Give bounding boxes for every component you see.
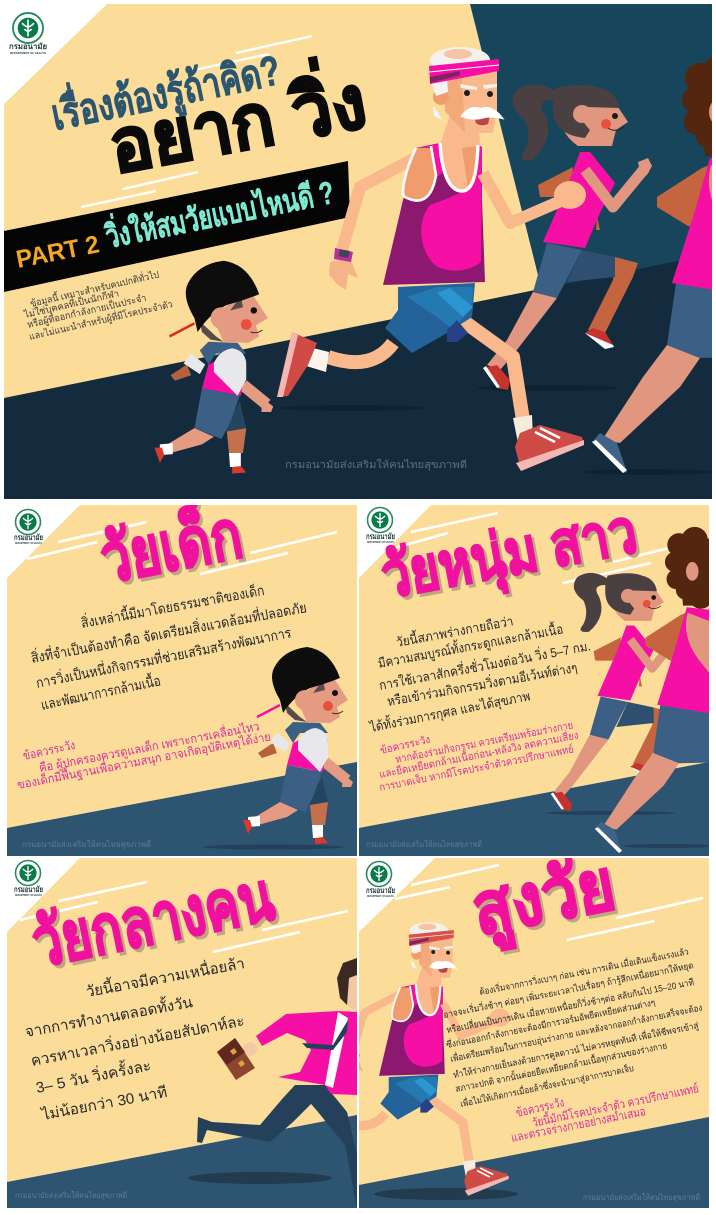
heading: young adults: วัยหนุ่ม สาว [379,500,646,618]
logo: กรมอนามัย [366,532,395,541]
heading: middle age [32,880,280,968]
callout: seniors caution [509,1079,700,1145]
illustration: child runner [154,261,273,474]
text block: children advice: สิ่งเหล่านี้มีมาโดยธรรมชาติของเด็ก [79,580,266,631]
panel: main cover [4,4,716,499]
text block: children advice: การวิ่งเป็นหนึ่งกิจกรรมที่ช่วยเสริมสร้างพัฒนาการ [34,623,293,691]
heading: seniors: สูงวัย [466,845,622,956]
text block: young adults advice: ได้ทั้งร่วมการกุศล และได้สุขภาพ [367,686,532,736]
text block: middle age advice: จากการทำงานตลอดทั้งวัน [23,991,194,1041]
text block: seniors advice: ต้องเริ่มจากการวิ่งเบาๆ ก่อน เช่น การเดิน เมื่อเดินแข็งแรงแล้ว [478,945,689,997]
logo [14,510,43,545]
text block: middle age advice [23,952,246,1124]
logo: department of health: กรมอนามัย [9,42,47,51]
text block: middle age advice: 3– 5 วัน วิ่งครั้งละ [34,1054,153,1097]
heading: children [100,505,246,585]
heading: children: วัยเด็ก [94,493,248,598]
callout: young adults caution: หากต้องร่วมกิจกรรม ควรเตรียมพร้อมร่างกาย [394,718,574,766]
text block: disclaimer [22,268,174,343]
callout: young adults caution: การบาดเจ็บ หากมีโรคประจำตัวควรปรึกษาแพทย์ [378,741,575,794]
illustration: adult woman runner [595,527,714,853]
logo [366,862,395,898]
footer credit: กรมอนามัยส่งเสริมให้คนไทยสุขภาพดี [22,840,151,849]
banner: part 2 [4,161,350,292]
text block: children advice [29,580,308,713]
text block: middle age advice: ไม่น้อยกว่า 30 นาที [39,1083,169,1124]
heading: seniors: สูงวัย [469,848,625,959]
heading: cover title: อยาก วิ่ง [101,49,373,189]
heading: middle age: วัยกลางคน [29,861,283,985]
banner: part 2: วิ่งให้สมวัยแบบไหนดี ? [101,169,337,255]
panel: middle age [7,858,357,1208]
text block: seniors advice: สภาวะปกติ จากนั้นค่อยยืดเหยียดกล้ามเนื้อทุกส่วนของร่างกาย [454,1038,668,1095]
illustration: businessman runner [197,958,357,1208]
illustration: child runner [243,647,353,844]
logo: DEPARTMENT OF HEALTH [15,541,42,545]
logo [366,508,395,544]
logo: DEPARTMENT OF HEALTH [367,894,394,898]
callout: children caution: ข้อควรระวัง [22,738,76,763]
text block: young adults advice: วัยนี้สภาพร่างกายถือว่า [394,611,515,650]
logo: DEPARTMENT OF HEALTH [367,540,394,544]
text block: seniors advice: ทำให้ร่างกายเย็นลงด้วยการคูลดาวน์ ไม่ควรหยุดทันที เพื่อให้ชีพจรเข้าสู่ [452,1018,700,1081]
logo: กรมอนามัย [14,885,43,894]
banner: part 2: PART 2 [14,230,102,274]
panel: children [7,493,357,856]
text block: disclaimer: และไม่แนะนำสำหรับผู้ที่มีโรคประจำตัว [28,297,174,343]
callout: seniors caution: และตรวจร่างกายอย่างสม่ำเสมอ [509,1102,647,1145]
logo: กรมอนามัย [14,533,43,542]
illustration: old man runner [277,47,586,471]
logo: department of health [9,13,47,55]
illustration: old man runner [359,922,510,1196]
callout: children caution: ของเด็กมีพื้นฐานเพื่อความสนุก อาจเกิดอุบัติเหตุได้ง่าย [16,727,272,793]
heading: middle age: วัยกลางคน [26,858,280,982]
logo: department of health: DEPARTMENT OF HEALTH [10,51,46,55]
callout: young adults caution: ข้อควรระวัง [379,734,431,757]
text block: young adults advice: มีความสมบูรณ์ทั้งกระดูกและกล้ามเนื้อ [376,619,564,672]
footer credit: กรมอนามัยส่งเสริมให้คนไทยสุขภาพดี [366,840,482,849]
text block: disclaimer: ไม่ใช่บุคคลที่เป็นนักกีฬา [22,286,120,321]
text block: young adults advice: การใช้เวลาสักครึ่งชั่วโมงต่อวัน วิ่ง 5–7 กม. [378,637,592,693]
text block: children advice: และพัฒนาการกล้ามเนื้อ [39,670,162,713]
illustration: adult woman runner [592,55,716,473]
illustration: young woman runner [483,84,652,390]
text block: seniors advice [442,945,703,1110]
illustration: young woman runner [550,572,666,812]
text block: disclaimer: ข้อมูลนี้ เหมาะสำหรับคนปกติทั่วไป [29,268,160,310]
text block: seniors advice: เพื่อไม่ให้เกิดการเมื่อยล้าซึ่งจะนำมาสู่อาการบาดเจ็บ [459,1061,635,1110]
footer credit: กรมอนามัยส่งเสริมให้คนไทยสุขภาพดี [285,459,467,471]
footer credit: กรมอนามัยส่งเสริมให้คนไทยสุขภาพดี [15,1191,127,1200]
heading: young adults [381,517,640,600]
logo: กรมอนามัย [366,886,395,895]
panel: seniors [359,858,709,1208]
callout: young adults caution: และยืดเหยียดกล้ามเนื้อก่อน-หลังวิ่ง ลดความเสี่ยง [378,727,580,781]
callout: seniors caution: ข้อควรระวัง [515,1095,565,1120]
logo: DEPARTMENT OF HEALTH [15,893,42,897]
text block: young adults advice: หรือเข้าร่วมกิจกรรมวิ่งตามอีเว้นท์ต่างๆ [386,659,578,709]
heading: cover subtitle: เรื่องต้องรู้ถ้าคิด? [46,40,285,142]
text block: children advice: สิ่งที่จำเป็นต้องทำคือ จัดเตรียมสิ่งแวดล้อมที่ปลอดภัย [29,598,308,666]
text block: disclaimer: หรือผู้ที่ออกกำลังกายเป็นประจำ [26,291,148,331]
logo [14,860,43,897]
heading: young adults: วัยหนุ่ม สาว [376,497,643,615]
text block: seniors advice: ซึ่งก่อนออกกำลังกายจะต้องมีการวอร์มอัพยืดเหยียดส่วนต่างๆ [445,995,656,1050]
callout: children caution: คือ ผู้ปกครองควรดูแลเด็ก เพราะการเคลื่อนไหว [38,717,261,776]
text block: middle age advice: ควรหาเวลาวิ่งอย่างน้อยสัปดาห์ละ [29,1010,246,1070]
panel: young adults [359,497,714,856]
heading: children: วัยเด็ก [97,496,251,601]
footer credit: กรมอนามัยส่งเสริมให้คนไทยสุขภาพดี [583,1193,700,1202]
text block: middle age advice: วัยนี้อาจมีความเหนื่อยล้า [84,952,246,1001]
text block: young adults advice [367,611,592,736]
text block: seniors advice: อาจจะเริ่มวิ่งช้าๆ ค่อยๆ เพิ่มระยะเวลาไปเรื่อยๆ ถ้ารู้สึกเหนื่อยมากให้หยุด [442,958,695,1021]
text block: seniors advice: หรือเปลี่ยนเป็นการเดิน เมื่อหายเหนื่อยก็วิ่งช้าๆต่อ สลับกันไป 15–20 นาที [445,975,695,1035]
